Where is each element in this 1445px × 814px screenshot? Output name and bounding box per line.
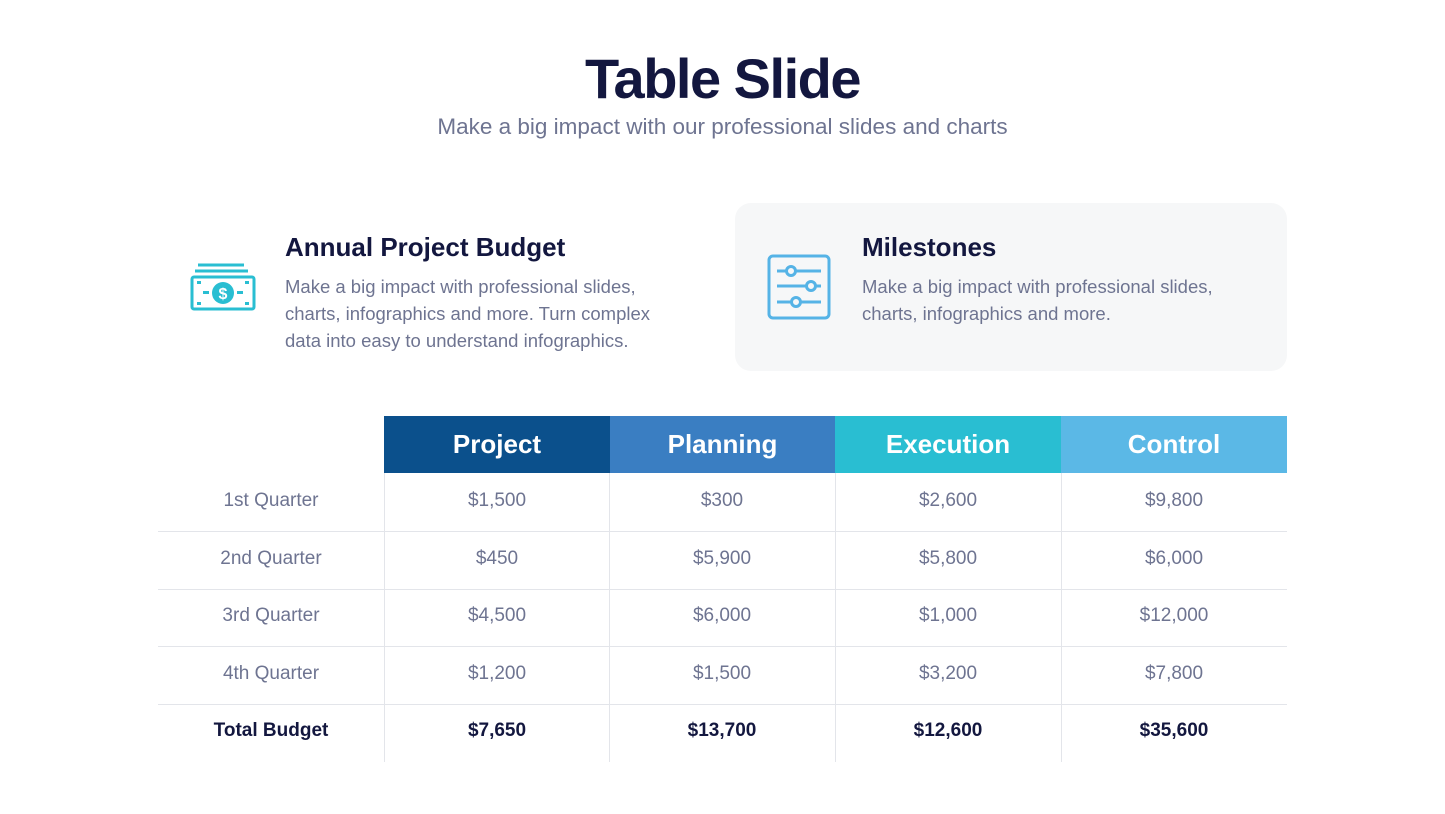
table body: $450 <box>476 548 518 569</box>
table body: $300 <box>701 490 743 511</box>
table <box>158 416 1287 762</box>
table body: $7,650 <box>468 720 526 741</box>
table body: $3,200 <box>919 663 977 684</box>
table body: Total Budget <box>214 720 328 741</box>
header row: Execution <box>886 429 1010 459</box>
header row: Project <box>453 429 541 459</box>
table body: $6,000 <box>1145 548 1203 569</box>
table body: $1,000 <box>919 605 977 626</box>
table body <box>214 490 1208 741</box>
header row: Planning <box>668 429 777 459</box>
table body: 3rd Quarter <box>222 605 320 626</box>
table body: $5,900 <box>693 548 751 569</box>
text block: milestones <box>862 232 1213 324</box>
text block: annual budget: Annual Project Budget <box>285 232 565 262</box>
title: Table Slide <box>585 47 860 110</box>
table body: $1,200 <box>468 663 526 684</box>
table body: 4th Quarter <box>223 663 319 684</box>
text block: milestones: Milestones <box>862 232 996 262</box>
table body: $2,600 <box>919 490 977 511</box>
table body: $9,800 <box>1145 490 1203 511</box>
table body: $1,500 <box>693 663 751 684</box>
table body: $4,500 <box>468 605 526 626</box>
header row <box>384 416 1287 473</box>
table body: $6,000 <box>693 605 751 626</box>
text block: milestones: Make a big impact with professional slides, charts, infographics and more. <box>862 276 1213 324</box>
text block: annual budget: Make a big impact with professional slides, charts, infographics and more. Turn complex data into easy to understand infographics. <box>285 276 650 351</box>
icon: money: $ <box>219 286 228 303</box>
table body: $12,000 <box>1140 605 1208 626</box>
text block: annual budget <box>285 232 650 351</box>
table body: $35,600 <box>1140 720 1208 741</box>
header row: Control <box>1128 429 1220 459</box>
table body: $13,700 <box>688 720 756 741</box>
icon: sliders <box>768 254 830 320</box>
table body: $7,800 <box>1145 663 1203 684</box>
icon: money <box>190 264 256 310</box>
panel: milestones <box>735 203 1287 371</box>
table body: 1st Quarter <box>223 490 319 511</box>
subtitle: Make a big impact with our professional slides and charts <box>437 114 1008 139</box>
table body: $5,800 <box>919 548 977 569</box>
table body: 2nd Quarter <box>220 548 322 569</box>
table body: $1,500 <box>468 490 526 511</box>
table body: $12,600 <box>914 720 982 741</box>
